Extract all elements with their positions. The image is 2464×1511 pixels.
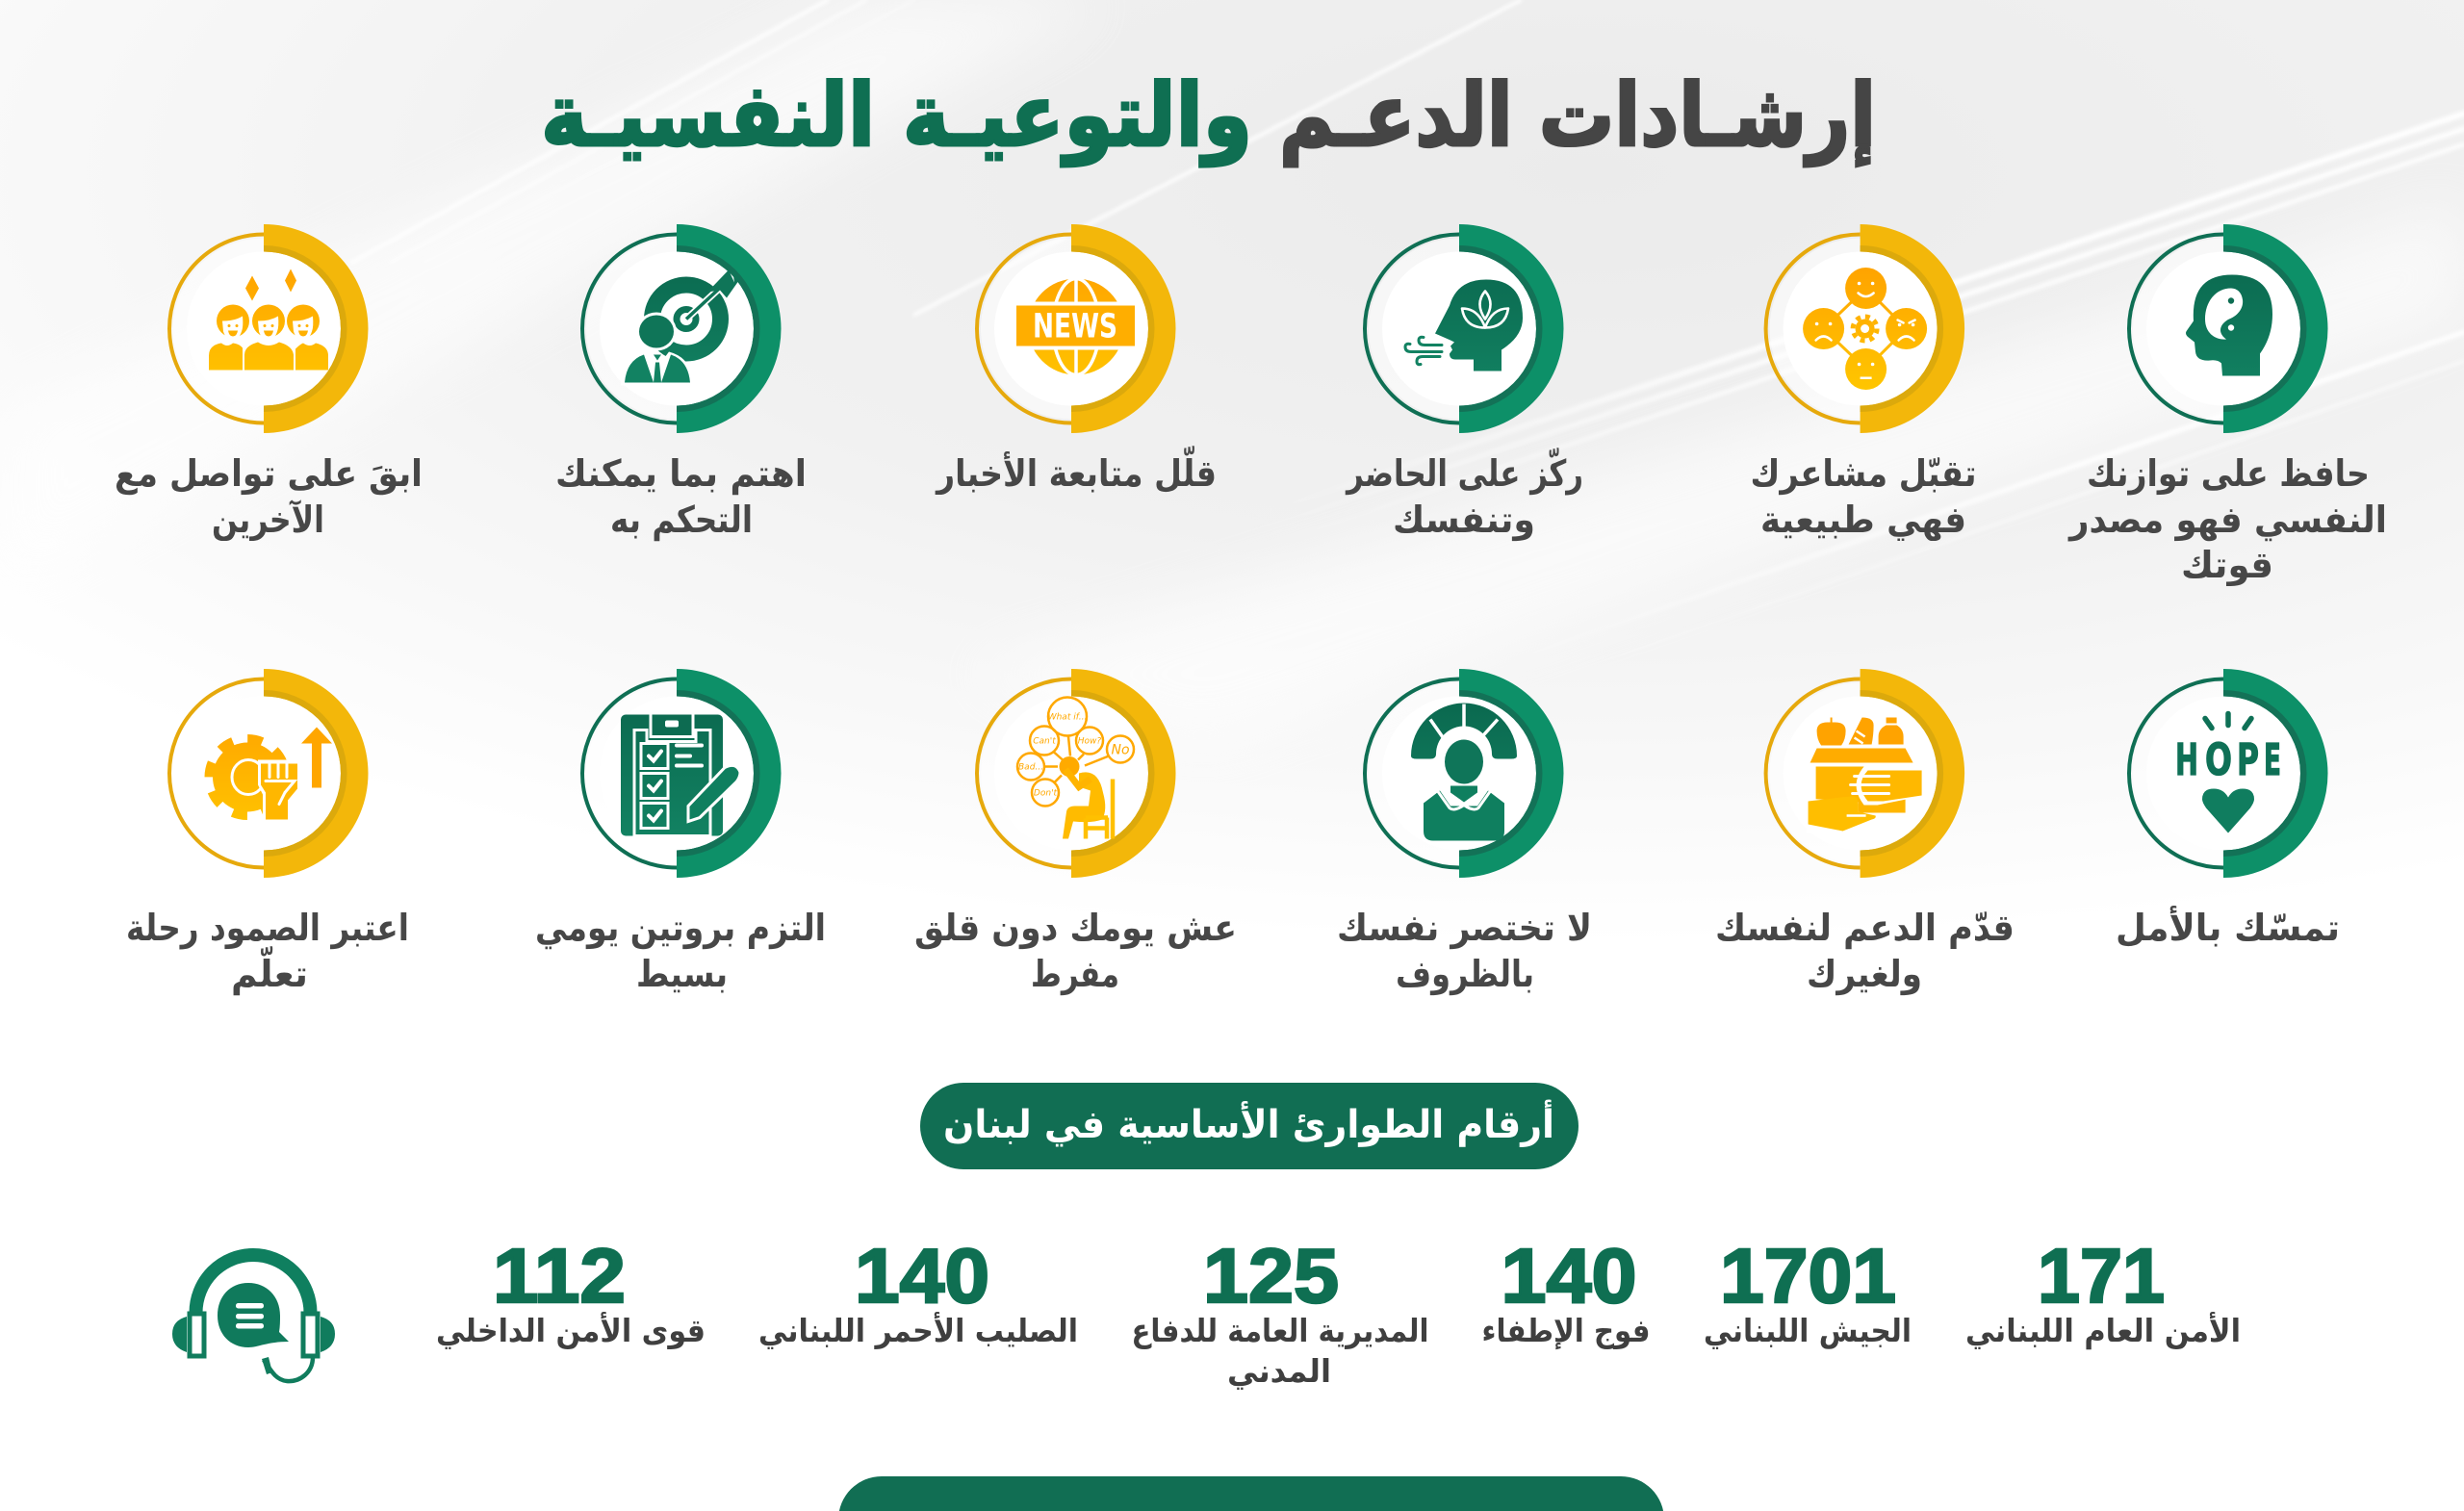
icon: worried seated figure with thought bubbles	[977, 669, 1176, 878]
label: فهي طبيعية	[1760, 499, 1966, 541]
icon: news globe: NEWS	[1033, 308, 1117, 346]
number: red cross 140: الصليب الأحمر اللبناني	[758, 1311, 1078, 1350]
label	[1337, 907, 1592, 996]
icon: call-centre headset with chat bubble	[172, 1255, 335, 1381]
label: ولغيرك	[1807, 953, 1922, 996]
label	[1750, 452, 1977, 541]
card: live your day without excessive worry	[914, 669, 1237, 995]
label: عش يومك دون قلق	[914, 907, 1237, 950]
label: حافظ على توازنك	[2087, 452, 2370, 495]
card: don't reduce yourself to circumstances	[1337, 669, 1592, 996]
number: general security 171: الأمن العام اللبناني	[1965, 1311, 2241, 1350]
icon: person with target and arrow	[582, 224, 782, 433]
number: lebanese army 1701	[1704, 1233, 1912, 1349]
icon: news globe	[977, 224, 1176, 433]
label: قوتك	[2181, 544, 2273, 586]
icon: worried seated figure with thought bubbles: How?	[1078, 737, 1101, 747]
label: التزم بروتين يومي	[535, 907, 826, 950]
icon: worried seated figure with thought bubbles: No	[1111, 743, 1130, 758]
icon: worried seated figure with thought bubbles: What if...	[1048, 712, 1087, 722]
number: internal security 112	[436, 1233, 706, 1350]
icon: checklist clipboard and pen	[582, 669, 782, 878]
icon: hope with heart: E	[2264, 734, 2281, 785]
icon: food box and hands	[1766, 669, 1964, 878]
icon: gear, fist and up arrow	[169, 669, 368, 878]
label: اهتم بما يمكنك	[555, 452, 807, 496]
number: internal security 112: 112	[493, 1233, 626, 1319]
heading pill: emergency numbers in Lebanon	[920, 1083, 1578, 1169]
card: commit to a simple daily routine	[535, 669, 826, 995]
number: internal security 112: قوى الأمن الداخلي	[436, 1311, 706, 1350]
number: general security 171	[1965, 1233, 2241, 1350]
label: الآخرين	[212, 499, 324, 541]
heading pill: emergency numbers in Lebanon: أرقام الطوارئ الأساسية في لبنان	[943, 1099, 1554, 1147]
label: اعتبر الصمود رحلة	[126, 907, 409, 949]
number: lebanese army 1701: الجيش اللبناني	[1704, 1312, 1912, 1349]
label	[1345, 448, 1583, 542]
bottom pill (cropped by page edge)	[838, 1476, 1664, 1511]
label: النفسي فهو مصدر	[2067, 499, 2387, 541]
card: hold on to hope	[2116, 669, 2340, 949]
number: civil defense 125	[1132, 1233, 1428, 1390]
label	[555, 452, 807, 542]
card: keep your psychological balance	[2067, 224, 2387, 586]
icon: group of three people	[169, 224, 368, 433]
number: red cross 140	[758, 1233, 1078, 1350]
card: accept your feelings	[1750, 224, 1977, 541]
label	[914, 907, 1237, 995]
number: civil defense 125: المديرية العامة للدفاع	[1132, 1312, 1428, 1350]
card: care about what you can control	[555, 224, 807, 542]
icon: head with yin-yang	[2129, 224, 2327, 433]
number: civil defense 125: المدني	[1227, 1352, 1331, 1390]
label: تعلّم	[231, 946, 308, 996]
label	[126, 907, 409, 996]
label: لا تختصر نفسك	[1337, 907, 1592, 949]
label: ابقَ على تواصل مع	[115, 452, 423, 495]
title: إرشـادات الدعـم	[1279, 65, 1876, 166]
icon: worried seated figure with thought bubbles: Don't	[1034, 789, 1058, 799]
icon: hope with heart: P	[2237, 734, 2259, 785]
label: وتنفسك	[1393, 499, 1535, 542]
title	[541, 65, 1876, 167]
label: بالظروف	[1396, 953, 1534, 996]
icon: four emotion faces	[1766, 224, 1964, 433]
label: مفرط	[1031, 953, 1119, 995]
number: fire brigade 140	[1482, 1233, 1650, 1350]
label	[535, 907, 826, 995]
card: consider resilience a learning journey	[126, 669, 409, 996]
card: focus on the present and breathe	[1345, 224, 1583, 542]
label: التحكم به	[610, 499, 753, 542]
number: fire brigade 140: 140	[1502, 1233, 1636, 1319]
card: stay in touch with others	[115, 224, 423, 541]
icon: worried seated figure with thought bubbles: Can't	[1033, 737, 1056, 747]
label: بسيط	[636, 953, 728, 995]
title: والتوعيـة النفسيـة	[541, 65, 1252, 167]
number: general security 171: 171	[2038, 1233, 2165, 1319]
icon: breathing head with lotus	[1365, 224, 1563, 433]
number: red cross 140: 140	[855, 1233, 989, 1319]
icon: person with headdress segments	[1365, 669, 1563, 878]
label	[2067, 452, 2387, 586]
icon: hope with heart: H	[2175, 734, 2198, 785]
number: lebanese army 1701: 1701	[1720, 1233, 1896, 1319]
label: تمسّك بالأمل	[2116, 905, 2340, 949]
icon: hope with heart: O	[2205, 734, 2232, 785]
card: offer support to yourself and others	[1715, 669, 2015, 996]
icon: worried seated figure with thought bubbles: Bad...	[1018, 762, 1043, 772]
label: تقبّل مشاعرك	[1750, 452, 1977, 495]
label: قلّل متابعة الأخبار	[935, 446, 1217, 495]
label	[115, 452, 423, 541]
number: civil defense 125: 125	[1203, 1233, 1339, 1319]
label: ركّز على الحاضر	[1345, 448, 1583, 495]
card: reduce following the news	[935, 224, 1217, 495]
number: fire brigade 140: فوج الإطفاء	[1482, 1312, 1650, 1350]
label	[1715, 907, 2015, 996]
label: قدّم الدعم لنفسك	[1715, 907, 2015, 950]
icon: hope with heart	[2129, 669, 2327, 878]
